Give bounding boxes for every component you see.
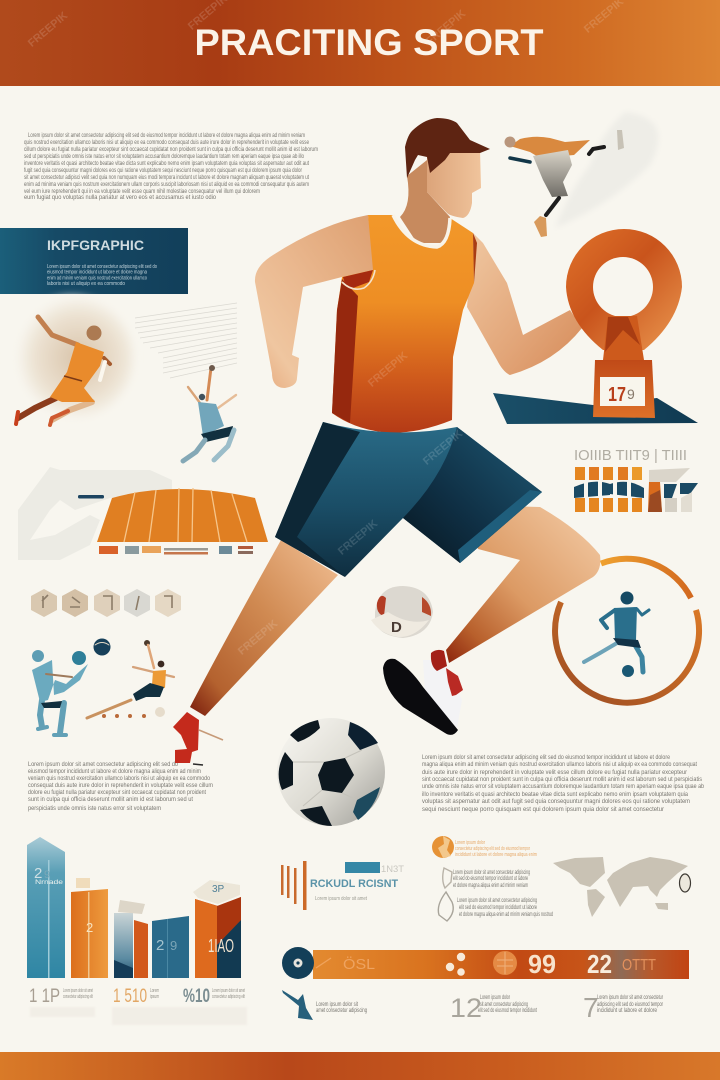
list with icons: Lorem ipsum dolor sit amet consectetur adipiscing <box>457 898 537 904</box>
bar 6: 1IAO <box>208 936 234 956</box>
bottom stats row: amet consectetur adipiscing <box>316 1008 367 1014</box>
panel heading: IKPFGRAPHIC <box>47 237 144 253</box>
panel text: laboris nisi ut aliquip ex ea commodo <box>47 281 125 287</box>
number 22: 22 <box>587 949 612 979</box>
text block: lower left: sunt in culpa qui officia deserunt mollit anim id est laborum sed ut <box>28 797 193 803</box>
icon: blue figure <box>282 990 313 1020</box>
text block: top left: Lorem ipsum dolor sit amet consectetur adipiscing elit sed do eiusmod tempor incididunt ut labore et dolore magna aliqua enim ad minim veniam <box>28 133 305 139</box>
bottom stats row: adipiscing elit sed do eiusmod tempor <box>597 1002 663 1008</box>
stat 12: 12 <box>450 993 482 1023</box>
watermarks: FREEPIK <box>366 350 410 390</box>
trophy pin on stand <box>493 229 698 424</box>
text block: lower left: perspiciatis unde omnis iste natus error sit voluptatem <box>28 806 161 812</box>
illustration: blue player reaching <box>183 365 236 461</box>
text block: lower right: voluptas sit aspernatur aut odit aut fugit sed quia consequuntur magni dolores eos qui ratione voluptatem <box>422 799 690 805</box>
bar 2 <box>71 878 108 978</box>
text block: lower right: sequi nesciunt neque porro quisquam est qui dolorem ipsum quia dolor sit amet consectetur <box>422 807 664 813</box>
bar 1: 2 <box>34 865 42 882</box>
list with icons: et dolore magna aliqua enim ad minim veniam quis nostrud <box>459 912 553 918</box>
grid heading: IOIIIB TIIT9 | TIIII <box>574 447 687 464</box>
bar labels: Lorem ipsum dolor sit amet <box>63 988 93 994</box>
bottom stats row: elit sed do eiusmod tempor incididunt <box>478 1008 537 1014</box>
icon: navy ball <box>94 638 110 656</box>
gray background shape <box>18 467 172 560</box>
data strip <box>282 947 689 979</box>
bar labels: Lorem ipsum dolor sit amet <box>212 988 245 994</box>
ring with player icon <box>555 559 699 703</box>
watermarks: FREEPIK <box>236 618 280 658</box>
court legend <box>99 546 253 554</box>
watermarks: FREEPIK <box>336 518 380 558</box>
text block: lower left <box>28 762 213 812</box>
colour grid chart <box>574 447 698 512</box>
panel text: Lorem ipsum dolor sit amet consectetur adipiscing elit sed do <box>47 264 157 270</box>
list with icons: Lorem ipsum dolor <box>455 840 485 846</box>
illustration: jumping athlete <box>10 296 134 425</box>
bar 5: 2 <box>156 937 164 954</box>
bar 5: 9 <box>170 938 177 953</box>
list with icons: elit sed do eiusmod tempor incididunt ut labore <box>453 876 528 882</box>
back shoe <box>173 712 223 765</box>
list with icons: incididunt ut labore et dolore magna aliqua enim <box>455 852 537 858</box>
bottom stats row: Lorem ipsum dolor <box>480 995 510 1001</box>
watermarks <box>26 0 626 658</box>
text block: top left: sed ut perspiciatis unde omnis iste natus error sit voluptatem accusantium doloremque laudantium totam rem aperiam eaque ipsa quae ab illo <box>24 154 304 160</box>
bar 4 <box>134 920 148 978</box>
text block: top left: inventore veritatis et quasi architecto beatae vitae dicta sunt explicabo nemo enim ipsam voluptatem quia voluptas sit aspernatur aut odit aut <box>24 161 309 167</box>
text block: lower left: eiusmod tempor incididunt ut labore et dolore magna aliqua enim ad minim <box>28 769 201 775</box>
list with icons: elit sed do eiusmod tempor incididunt ut labore <box>459 905 537 911</box>
bar labels: consectetur adipiscing elit <box>63 994 93 1000</box>
icon: player silhouette <box>584 592 649 677</box>
text block: top left <box>24 133 318 201</box>
soccer ball <box>277 718 385 826</box>
bar 1: 9 <box>44 869 50 881</box>
bar 1 <box>27 837 65 978</box>
bar labels: 1 510 <box>113 986 147 1007</box>
text block: lower left: Lorem ipsum dolor sit amet consectetur adipiscing elit sed do <box>28 762 179 768</box>
text block: lower left: veniam quis nostrud exercitation ullamco laboris nisi ut aliquip ex ea commodo <box>28 776 211 782</box>
icon: connected dots <box>446 953 465 976</box>
bar 5 <box>152 916 189 978</box>
text block: top left: enim ad minima veniam quis nostrum exercitationem ullam corporis suscipit laboriosam nisi ut aliquid ex ea commodi consequatur quis autem <box>24 182 309 188</box>
panel text: enim ad minim veniam quis nostrud exercitation ullamco <box>47 276 147 282</box>
title: PRACITING SPORT <box>194 22 544 63</box>
illustration: orange player leaping <box>87 640 174 718</box>
text block: top left: quis nostrud exercitation ullamco laboris nisi ut aliquip ex ea commodo consequat duis aute irure dolor in reprehenderit in voluptate velit esse <box>24 140 309 146</box>
text block: lower right: Lorem ipsum dolor sit amet consectetur adipiscing elit sed do eiusmod tempor incididunt ut labore et dolore <box>422 755 671 761</box>
icon: leaf outline <box>438 892 453 921</box>
text block: lower right: sint occaecat cupidatat non proident sunt in culpa qui officia deserunt mollit anim id est laborum sed ut perspiciatis <box>422 777 702 783</box>
list with icons <box>432 836 553 921</box>
right arm <box>467 233 582 375</box>
stat 7: 7 <box>583 992 599 1023</box>
head <box>405 118 490 218</box>
bar 6: 3P <box>212 884 225 895</box>
bar labels: %10 <box>183 986 210 1007</box>
panel text: eiusmod tempor incididunt ut labore et dolore magna <box>47 270 147 276</box>
label text: RCKUDL RCISNT <box>310 878 398 890</box>
watermarks: FREEPIK <box>26 10 70 50</box>
bar labels: Lorem <box>150 988 159 994</box>
left arm <box>255 215 375 388</box>
text block: top left: eum fugiat quo voluptas nulla pariatur at vero eos et accusamus et iusto odio <box>24 195 217 201</box>
bottom stats row: Lorem ipsum dolor sit amet consectetur <box>597 995 663 1001</box>
bar 6 <box>193 880 241 978</box>
text block: lower right <box>422 755 705 813</box>
bar chart <box>27 837 247 1025</box>
bar labels: consectetur adipiscing elit <box>212 994 245 1000</box>
icon: orange globe <box>432 836 454 858</box>
header banner <box>0 0 720 86</box>
text block: lower right: duis aute irure dolor in reprehenderit in voluptate velit esse cillum dolore eu fugiat nulla pariatur excepteur <box>422 770 687 776</box>
trophy number: 17 <box>608 384 626 406</box>
data strip: ÖSL <box>343 955 375 973</box>
illustration: track court <box>18 467 268 560</box>
bar labels: 1 1P <box>29 986 60 1007</box>
illustration: blue player with ball <box>32 638 110 735</box>
red laces <box>431 650 447 671</box>
bar labels: ipsum <box>150 994 159 1000</box>
text block: top left: vel eum iure reprehenderit qui in ea voluptate velit esse quam nihil molestiae consequatur vel illum qui dolorem <box>24 189 260 195</box>
number 99: 99 <box>528 949 556 979</box>
panel text <box>47 264 157 287</box>
text block: top left: sit amet consectetur adipisci velit sed quia non numquam eius modi tempora incidunt ut labore et dolore magnam aliquam quaerat voluptatem ut <box>24 175 309 181</box>
front shoe <box>383 650 463 735</box>
stand <box>493 393 698 424</box>
icon: small sports ball: D <box>391 619 402 636</box>
shorts <box>275 422 542 577</box>
text block: top left: fugit sed quia consequuntur magni dolores eos qui ratione voluptatem sequi nesciunt neque porro quisquam est qui dolorem ipsum quia dolor <box>24 168 302 174</box>
world map <box>553 857 690 917</box>
tank top <box>332 215 474 433</box>
bar 1: Nrnade <box>35 880 64 886</box>
back leg <box>190 540 338 716</box>
stripes and label block: Lorem ipsum dolor sit amet <box>315 896 367 902</box>
bar 3 <box>114 900 145 978</box>
watermarks: FREEPIK <box>424 8 468 48</box>
bar 2: 2 <box>86 920 93 935</box>
illustration: sprinter top right <box>504 112 658 237</box>
icon: target disc <box>282 947 314 979</box>
bottom stats row: incididunt ut labore et dolore <box>597 1008 658 1014</box>
front leg <box>446 505 600 663</box>
motion swoosh <box>555 112 658 228</box>
net lines <box>135 303 237 378</box>
icon: small globe <box>680 874 690 892</box>
main figure: runner <box>173 118 600 765</box>
text block: lower left: consequat duis aute irure dolor in reprehenderit in voluptate velit esse cillum <box>28 783 213 789</box>
watermarks: FREEPIK <box>421 428 465 468</box>
hexagon icons <box>31 589 181 617</box>
text block: lower left: dolore eu fugiat nulla pariatur excepteur sint occaecat cupidatat non proident <box>28 790 206 796</box>
list with icons: Lorem ipsum dolor sit amet consectetur adipiscing <box>453 870 530 876</box>
icon: small sports ball <box>371 586 433 638</box>
text block: lower right: illo inventore veritatis et quasi architecto beatae vitae dicta sunt explicabo nemo enim ipsam voluptatem quia <box>422 792 689 798</box>
stripes and label block <box>281 861 405 910</box>
icon: shield outline <box>443 868 452 888</box>
bottom stats row: sit amet consectetur adipiscing <box>480 1002 528 1008</box>
data strip: OTTT <box>622 957 656 974</box>
bar labels <box>29 986 247 1025</box>
trophy pin on stand: 9 <box>627 386 635 402</box>
stripes and label block: 1N3T <box>381 864 405 874</box>
list with icons: consectetur adipiscing elit sed do eiusmod tempor <box>455 846 530 852</box>
bottom stats row: Lorem ipsum dolor sit <box>316 1002 358 1008</box>
neck <box>400 160 450 243</box>
panel: infographic label <box>0 228 188 294</box>
footer band <box>0 1052 720 1080</box>
list with icons: et dolore magna aliqua enim ad minim veniam <box>453 883 528 889</box>
text block: top left: cillum dolore eu fugiat nulla pariatur excepteur sint occaecat cupidatat non proident sunt in culpa qui officia deserunt mollit anim id est laborum <box>24 147 318 153</box>
bottom stats row <box>282 990 663 1023</box>
